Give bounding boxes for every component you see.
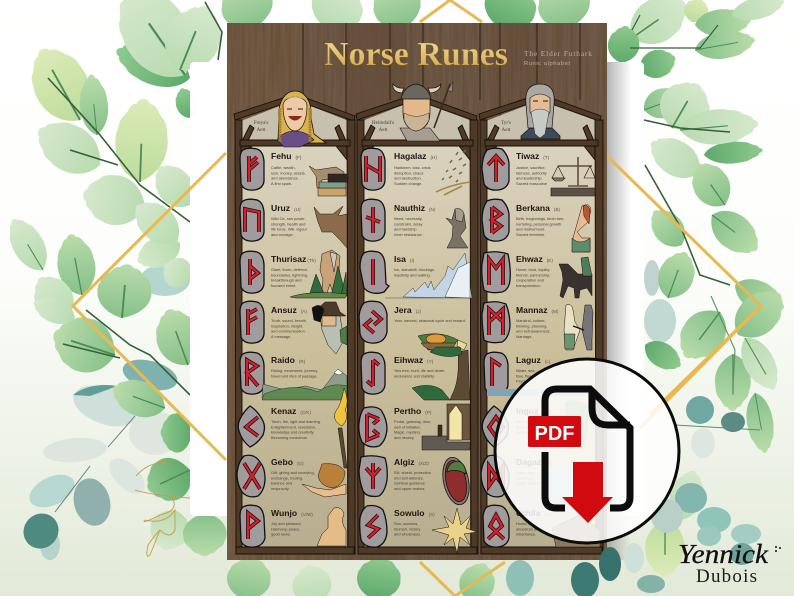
rune text: Mankind, culture, [516,318,546,323]
rune text: exchange, trading, [271,475,303,480]
rune text: Jera (J) [394,305,421,315]
badge: PDF download [495,359,679,543]
rune row: Eihwaz [361,347,470,400]
rune text: Ehwaz (E) [516,254,553,264]
rune row: Mannaz [482,302,593,350]
rune stone [359,407,387,447]
rune row: Ansuz [240,301,347,354]
rune text: and abundance. [271,176,299,181]
rune text: Sacred feminine. [516,232,545,237]
badge circle [495,359,679,543]
poster shadow [607,62,631,560]
rune text: and courage. [271,232,294,237]
rune text: reciprocity. [271,486,290,491]
illustration: dawn [540,462,595,500]
rune text: Uruz (U) [271,203,300,213]
rune text: A message. [271,334,291,339]
rune stone [482,302,510,343]
illustration: embracing couple [317,508,346,546]
rune text: Othila (O) [516,508,551,518]
rune text: friends, partnership, [516,272,550,277]
aett label: Aett [257,127,266,133]
rune text: Truth, sound, breath, [271,318,307,323]
rune text: good news. [271,532,291,537]
rune row: Gebo [237,455,346,497]
rune text: Gift, giving and receiving, [271,470,315,475]
illustration: hail and broken wheat [436,150,470,195]
rune stone [359,456,387,496]
rune text: Nauthiz (N) [394,203,435,213]
rune text: Hagalaz (H) [394,151,437,161]
rune text: Giant, thorn, defence, [271,267,308,272]
rune text: and destiny. [394,435,415,440]
rune stone [240,199,264,241]
rune text: triumph, victory [394,526,420,531]
rune text: Inner resistance. [394,232,423,237]
rune text: Laguz (L) [516,355,550,365]
rune stone [482,252,510,293]
gable roof [356,94,477,143]
rune text: Seed, fertility, [516,419,539,424]
rune text: Algiz (X/Z) [394,457,429,467]
rune text: inheritance. [516,532,536,537]
rune row: Berkana [482,199,591,252]
illustration: water strip [487,389,595,396]
rune text: Sowulo (S) [394,508,435,518]
rune text: potential. [516,430,532,435]
rune stone [481,455,509,497]
gable roof [234,94,355,143]
subtitle: The Elder Futhark [524,49,592,58]
rune text: thinking, planning, [516,323,547,328]
rune text: Psychic. [516,379,530,384]
eucalyptus leaves [16,260,676,596]
illustration: wizard and raven [312,302,347,354]
rune text: Gebo (G) [271,457,304,467]
aett label: Heimdall's [372,120,394,126]
rune stone [360,251,389,293]
icon: PDF tag [528,416,581,447]
rune text: nurturing, personal growth [516,221,561,226]
rune text: disruption, chaos [394,170,423,175]
rune text: Yew tree, hunt, life and death, [394,368,445,373]
illustration: couple holding hands [564,305,593,350]
rune text: Spiritual guidance [394,481,425,486]
rune row: Isa [360,251,472,298]
rune text: Horse, trust, loyalty, [516,267,550,272]
green leaves right [606,0,794,577]
illustration: pregnant woman [572,205,591,252]
rune text: clarity, awakening. [516,481,548,486]
rune stone [240,148,264,190]
rune text: Pertho (P) [394,406,431,416]
rune text: balance and [271,481,292,486]
gold scribble [135,463,190,556]
aett label: Aett [502,127,511,133]
rune text: Torch, fire, light and learning. [271,419,321,424]
rune text: well of initiation. [394,424,421,429]
rune text: and self-awareness. [516,329,551,334]
rune row: Tiwaz [482,148,595,196]
rune text: Home, land, [516,521,537,526]
rune stone [482,148,509,190]
rune text: Sun, success, [394,521,418,526]
rune text: Kenaz (C/K) [271,406,311,416]
rune text: Wunjo (V/W) [271,508,313,518]
aett label: Freya's [254,120,268,126]
rune text: and motherhood. [516,227,545,232]
rune row: Sowulo [360,506,477,553]
rune row: Thurisaz [240,250,347,298]
rune text: Thurisaz(Th) [271,254,316,264]
white centre panel [190,62,644,516]
illustration: portal and steps [422,404,470,450]
wood background [227,23,607,560]
aett label: Aett [379,127,388,133]
rune text: Wild Ox, raw power, [271,216,306,221]
rune row: Hagalaz [361,148,470,195]
illustration: shield [439,455,473,507]
rune text: travel and rites of passage. [271,373,318,378]
rune text: Isa (I) [394,254,414,264]
rune text: transportation. [516,283,541,288]
icon: PDF tag: PDF [534,423,574,445]
poster: Norse Runes [227,23,607,560]
rune stone [240,251,264,293]
rune text: Need, necessity, [394,216,422,221]
rune text: ancestors and [516,526,540,531]
illustration: sun star [432,508,477,553]
rune row: Jera [359,301,467,351]
rune row: Uruz [240,199,347,248]
rune stone [361,148,385,190]
icon: document outline [545,389,630,508]
rune row: Wunjo [240,505,346,547]
signature: Yennick Dubois: Yennick [678,539,769,569]
rune stone [483,505,509,547]
rune row: Kenaz [238,388,347,468]
rune stone [484,352,508,394]
illustration: horse and rider [559,257,592,298]
rune text: knowledge and creativity. [271,430,314,435]
rune text: Fehu (F) [271,151,301,161]
rune row: Fehu [240,148,348,196]
rune stone [240,505,265,547]
rune row: Othila [483,505,600,547]
rune stone [238,406,264,447]
illustration: ox [314,206,347,248]
rune text: Inguz (Ng) [516,406,551,416]
rune stone [237,455,265,497]
illustration: yew tree [412,347,470,400]
rune text: fairness, authority [516,170,547,175]
portrait: Tyr [521,84,560,139]
rune text: flow, flux, [516,373,532,378]
rune text: Justice, sacrifice, [516,165,546,170]
rune text: Dawn, day, [516,470,535,475]
portrait: Heimdall [393,82,453,141]
subtitle [524,49,592,67]
rune stone [482,199,509,241]
rune row: Inguz [482,400,590,450]
illustration: cow and chest [309,166,348,196]
leaves above and below poster [214,0,596,596]
rune text: and destruction. [394,176,422,181]
illustration: kneeling figure [446,209,468,248]
frame [480,120,603,554]
rune text: endurance and stability. [394,373,435,378]
rune text: boundaries, lightning, [271,272,308,277]
parchment [363,146,470,547]
green leaves left [0,0,231,556]
rune text: new hope, [516,475,534,480]
rune text: Raido (R) [271,355,305,365]
rune row: Ehwaz [482,252,592,298]
rune row: Raido [240,352,347,400]
rune text: Water, sea, [516,368,536,373]
rune row: Pertho [359,404,470,450]
rune text: and wholeness. [394,532,421,537]
rune text: strength, health and [271,221,305,226]
rune stone [240,301,264,343]
rune text: Hailstorm, loss, crisis [394,165,431,170]
rune text: focused intent. [271,283,296,288]
rune text: Riding, movement, journey, [271,368,318,373]
panel: Freya's Aett [234,91,355,554]
rune text: Ice, standstill, blockage, [394,267,435,272]
eucalyptus sprays over right side [599,396,761,593]
rune text: Eihwaz (Y) [394,355,433,365]
branches [48,2,760,512]
rune text: Mannaz (M) [516,305,558,315]
portrait: Freya [277,91,326,147]
illustration: ice mountains [385,253,472,298]
rune text: cooperation and [516,278,544,283]
rune text: inspiration, insight, [271,323,303,328]
rune row: Laguz [484,352,595,396]
rune stone [240,352,264,394]
rune text: Becoming conscious. [271,435,308,440]
rune stone [361,199,385,241]
rune text: Harmony, peace, [271,526,300,531]
rune text: Marriage. [516,334,532,339]
rune text: Dagaz (D) [516,457,552,467]
rune text: Elk, shield, protection [394,470,431,475]
rune text: breakthrough and [271,278,302,283]
parchment [241,146,347,547]
rune text: A first spark. [271,181,292,186]
parchment [486,146,595,547]
title: Norse Runes [324,36,508,73]
rune text: and hardship. [394,227,418,232]
rune text: Joy and pleasure. [271,521,302,526]
rune text: inactivity and waiting. [394,272,431,277]
rune stone [359,301,387,343]
rune text: Magic, mystery [394,430,420,435]
illustration: homestead [552,515,600,547]
rune row: Dagaz [481,455,595,500]
rune text: Sudden change. [394,181,422,186]
rune text: and self-defense. [394,475,424,480]
rune text: Ansuz (A) [271,305,307,315]
rune stone [482,406,508,447]
rune text: Year, harvest, seasonal cycle and reward. [394,318,466,323]
illustration: harvest bowl [418,334,467,351]
rune text: Birth, beginnings, birch tree, [516,216,564,221]
illustration: scales of justice [551,157,595,196]
rune stone [360,506,387,547]
aett label: Tyr's [501,120,511,126]
rune text: Sacred masculine. [516,181,548,186]
rune text: Berkana (B) [516,203,560,213]
rune text: growth, gestation, [516,424,547,429]
rune stone [361,352,385,394]
frame [235,120,355,554]
rune text: Portal, gateway, door, [394,419,431,424]
illustration: torch [334,388,347,468]
gable roof [479,94,601,143]
rune text: luck, money, assets, [271,170,306,175]
panel: Heimdall's Aett [356,82,478,554]
subtitle: Runic alphabet [524,61,570,67]
rune text: and upper realms. [394,486,425,491]
icon: download arrow [562,462,613,523]
signature: Yennick Dubois: Dubois [696,566,757,587]
illustration: hand with pouch [302,464,346,497]
rune text: and leadership. [516,176,543,181]
rune row: Algiz [359,455,473,507]
rune text: constraint, delay [394,221,422,226]
panel: Tyr's Aett [479,84,603,554]
illustration: giant and trees [290,250,347,298]
signature: Yennick Dubois [678,539,781,587]
rune text: Tiwaz (T) [516,151,549,161]
rune text: Cattle, wealth, [271,165,296,170]
rune text: and communication. [271,329,306,334]
gold line into badge [650,306,761,414]
frame [357,120,478,554]
illustration: plant [565,400,590,450]
rune row: Nauthiz [361,199,468,248]
rune text: life force. Will, vigour [271,227,308,232]
rune text: Enlightenment, revelation, [271,424,316,429]
illustration: mountain landscape [262,369,347,400]
